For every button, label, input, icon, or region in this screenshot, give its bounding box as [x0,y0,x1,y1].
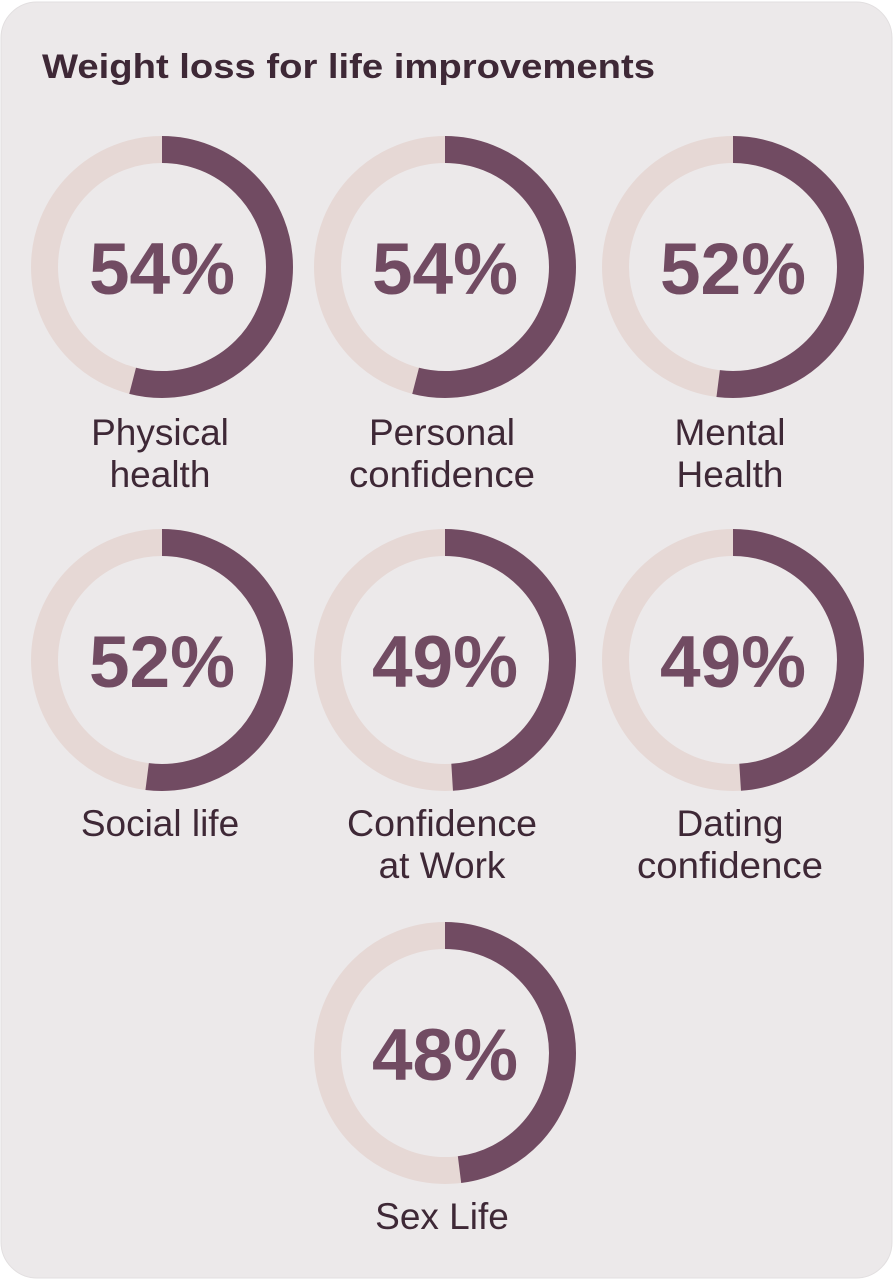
donut: mental health 52% [616,150,850,495]
donut: sex life 48% [328,936,562,1237]
donut: dating confidence 49%: Dating [677,803,783,844]
title: Weight loss for life improvements [42,48,655,86]
donut: confidence at work 49%: 49% [372,622,518,703]
donut: personal confidence 54%: 54% [372,229,518,310]
donut: mental health 52%: 52% [660,229,806,310]
donut: personal confidence 54%: Personal [369,412,515,453]
donut: mental health 52%: Health [677,454,783,495]
donut: social life 52%: Social life [81,803,239,844]
donut: social life 52% [44,542,280,844]
donut: confidence at work 49%: Confidence [347,803,537,844]
donut: physical health 54%: Physical [91,412,229,453]
donut: sex life 48%: Sex Life [375,1196,509,1237]
donut: personal confidence 54% [328,150,562,495]
donut: dating confidence 49%: confidence [637,845,823,886]
donut: physical health 54%: 54% [89,229,235,310]
donut: personal confidence 54%: confidence [349,454,535,495]
donut: physical health 54% [44,150,280,495]
donut: confidence at work 49%: at Work [379,845,506,886]
donut: dating confidence 49%: 49% [660,622,806,703]
donut: mental health 52%: Mental [674,412,786,453]
donut: social life 52%: 52% [89,622,235,703]
donut: dating confidence 49% [616,542,850,886]
donut: confidence at work 49% [328,542,562,886]
donut: sex life 48%: 48% [372,1015,518,1096]
donut: physical health 54%: health [110,454,210,495]
